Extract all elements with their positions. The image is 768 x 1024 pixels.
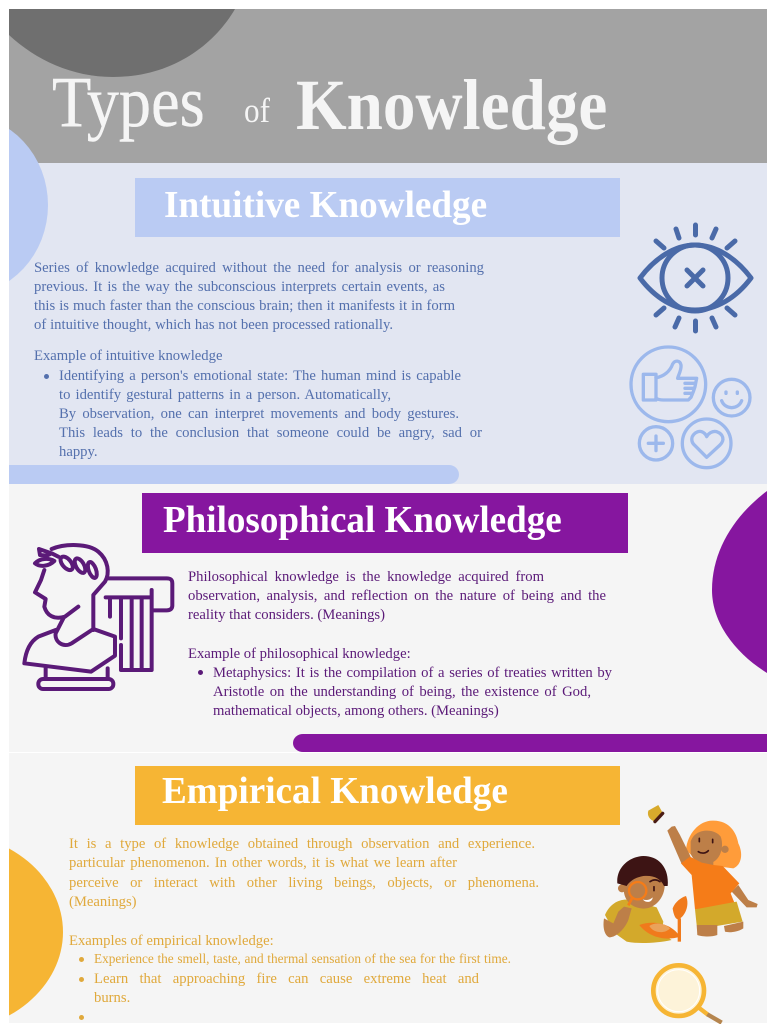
text block: intuitive example: Example of intuitive knowledge (34, 348, 222, 364)
heading bar: philosophical (142, 493, 628, 553)
heading bar: intuitive (135, 178, 620, 237)
blue bar (9, 465, 459, 484)
text block: philosophical example: Aristotle on the understanding of being, the existence of God, (213, 684, 591, 700)
text block: intuitive example: happy. (59, 444, 98, 460)
heading bar: empirical (135, 766, 620, 825)
header dark blob (9, 9, 235, 77)
blue side blob (9, 129, 48, 281)
text block: intuitive description (34, 260, 484, 333)
text block: intuitive description: Series of knowledge acquired without the need for analysis or reasoning (34, 260, 484, 276)
heading: Intuitive Knowledge: Intuitive Knowledge (164, 184, 487, 226)
text block: intuitive example: This leads to the conclusion that someone could be angry, sad or (59, 425, 482, 441)
text block: empirical examples: Learn that approaching fire can cause extreme heat and (94, 971, 479, 987)
title word: Knowledge: Knowledge (296, 65, 607, 145)
purple bar (293, 734, 767, 752)
text block: philosophical description: reality that considers. (Meanings) (188, 607, 385, 623)
icon: philosopher bust with column (24, 545, 172, 689)
text block: philosophical description: observation, analysis, and reflection on the nature of being and the (188, 588, 606, 604)
text block: intuitive description: this is much faster than the conscious brain; then it manifests it in form (34, 298, 455, 314)
icon: magnifying glass (653, 965, 722, 1023)
title word: of: of (244, 91, 270, 130)
text block: empirical description: (Meanings) (69, 894, 137, 910)
icon: children exploring nature (604, 805, 758, 943)
text block: philosophical description: Philosophical knowledge is the knowledge acquired from (188, 569, 544, 585)
text block: intuitive example: to identify gestural patterns in a person. Automatically, (59, 387, 391, 403)
section background: empirical (9, 753, 767, 1023)
text block: intuitive example: Identifying a person's emotional state: The human mind is capable (59, 368, 461, 384)
text block: empirical description: particular phenomenon. In other words, it is what we learn after (69, 855, 457, 871)
icon: thumbs up and emoji badges (631, 347, 750, 468)
yellow side blob (9, 848, 63, 1016)
girl (667, 821, 758, 936)
title (52, 62, 607, 145)
text block: philosophical example: mathematical objects, among others. (Meanings) (213, 703, 499, 719)
purple side blob (712, 491, 767, 673)
text block: intuitive description: of intuitive thought, which has not been processed rationally. (34, 317, 393, 333)
text block: empirical examples: Experience the smell, taste, and thermal sensation of the sea for the first time. (94, 951, 511, 966)
section background: philosophical (9, 484, 767, 752)
butterfly (648, 805, 663, 822)
text block: empirical examples: Examples of empirical knowledge: (69, 933, 274, 949)
title word: Types: Types (52, 62, 205, 142)
text block: intuitive description: previous. It is the way the subconscious interprets certain events, as (34, 279, 445, 295)
text block: intuitive example: By observation, one can interpret movements and body gestures. (59, 406, 459, 422)
text block: empirical description (69, 836, 539, 910)
text block: empirical description: perceive or interact with other living beings, objects, or phenomena. (69, 875, 539, 891)
text block: empirical examples: burns. (94, 990, 130, 1006)
text block: empirical examples (69, 933, 511, 1020)
heading: Empirical Knowledge: Empirical Knowledge (162, 770, 508, 812)
header band (9, 9, 767, 163)
section background: intuitive (9, 163, 767, 484)
boy (604, 856, 687, 943)
text block: philosophical description (188, 569, 606, 623)
text block: empirical description: It is a type of knowledge obtained through observation and experience. (69, 836, 535, 852)
heading: Philosophical Knowledge: Philosophical Knowledge (163, 499, 562, 541)
text block: philosophical example: Example of philosophical knowledge: (188, 646, 411, 662)
text block: philosophical example: Metaphysics: It is the compilation of a series of treaties written by (213, 665, 612, 681)
text block: intuitive example (34, 348, 482, 460)
text block: philosophical example (188, 646, 612, 719)
icon: eye (640, 225, 751, 331)
